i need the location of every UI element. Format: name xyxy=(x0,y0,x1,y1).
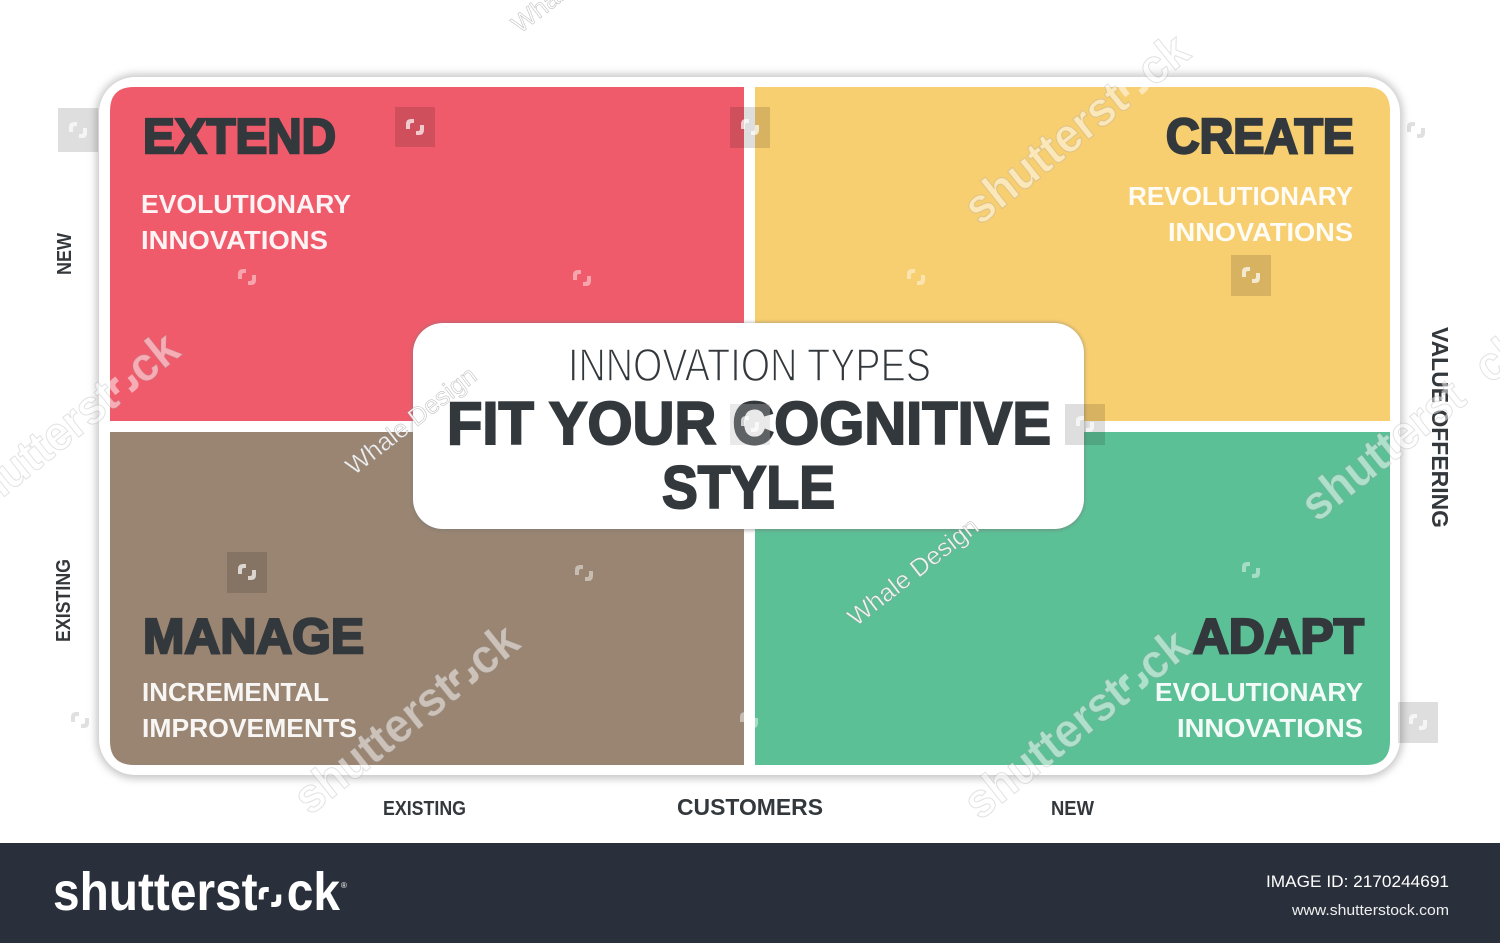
axis label: value offering new: NEW xyxy=(54,233,76,275)
text: adapt subtitle: EVOLUTIONARY xyxy=(1155,677,1363,707)
title: innovation types: INNOVATION TYPES xyxy=(568,339,931,391)
footer logo: shutterstock: shutterstock xyxy=(53,862,341,922)
watermark text: Whale Design xyxy=(340,361,482,481)
text: manage subtitle: IMPROVEMENTS xyxy=(142,713,357,743)
title: fit your cognitive style xyxy=(447,390,1051,521)
watermark icons xyxy=(58,107,1438,743)
text: extend subtitle: EVOLUTIONARY xyxy=(141,189,351,219)
axis title: customers: CUSTOMERS xyxy=(677,794,823,820)
text: manage subtitle xyxy=(142,677,357,743)
axis title: value offering: VALUE OFFERING xyxy=(1427,327,1453,528)
heading: adapt: ADAPT xyxy=(1193,610,1364,664)
image id: IMAGE ID: 2170244691 xyxy=(1266,873,1449,891)
text: extend subtitle: INNOVATIONS xyxy=(141,225,328,255)
axis label: customers new: NEW xyxy=(1051,798,1094,820)
footer logo: shutterstock: ® xyxy=(341,881,347,890)
watermark text: shutterstock xyxy=(954,23,1200,235)
text: extend subtitle xyxy=(141,189,351,255)
text: create subtitle xyxy=(1128,181,1353,247)
website url: www.shutterstock.com xyxy=(1291,903,1449,919)
axis label: customers existing: EXISTING xyxy=(383,798,466,820)
text: manage subtitle: INCREMENTAL xyxy=(142,677,329,707)
watermark text: shutterstock xyxy=(284,613,530,825)
panel: create quadrant xyxy=(755,87,1390,421)
panel: adapt quadrant xyxy=(755,432,1390,765)
watermark text: shutterstock xyxy=(954,618,1200,830)
panel: extend quadrant xyxy=(110,87,744,421)
text: adapt subtitle xyxy=(1155,677,1363,743)
text: adapt subtitle: INNOVATIONS xyxy=(1177,713,1363,743)
watermark text: Whale Design xyxy=(842,512,984,632)
outer frame panel xyxy=(96,74,1403,779)
footer bar xyxy=(0,843,1500,943)
axis label: value offering existing: EXISTING xyxy=(53,559,75,642)
heading: manage: MANAGE xyxy=(143,610,364,664)
center title card xyxy=(412,322,1085,531)
heading: create: CREATE xyxy=(1166,110,1354,164)
text: create subtitle: REVOLUTIONARY xyxy=(1128,181,1353,211)
panel: manage quadrant xyxy=(110,432,744,765)
heading: extend: EXTEND xyxy=(143,110,336,164)
title: fit your cognitive style: FIT YOUR COGNITIVE xyxy=(447,390,1051,457)
text: create subtitle: INNOVATIONS xyxy=(1168,217,1353,247)
title: fit your cognitive style: STYLE xyxy=(662,454,835,521)
